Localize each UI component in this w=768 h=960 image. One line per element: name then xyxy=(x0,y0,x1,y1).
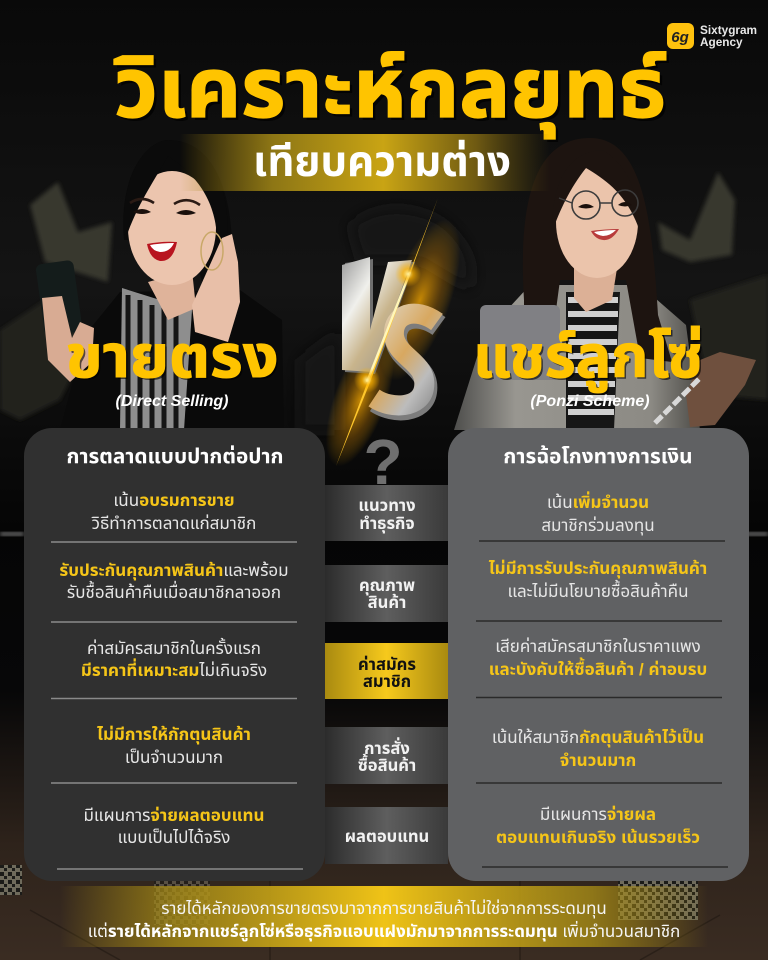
row 3: มีราคาที่เหมาะสมไม่เกินจริง xyxy=(81,658,267,680)
logo: Sixtygram Agency: 6g xyxy=(671,29,689,46)
row 1: เน้นเพิ่มจำนวน xyxy=(547,491,649,512)
row 5 xyxy=(496,804,700,847)
row 2: ไม่มีการรับประกันคุณภาพสินค้า xyxy=(489,558,707,579)
tab: business approach: แนวทาง xyxy=(358,496,416,515)
subtitle band xyxy=(180,134,550,191)
panel: direct selling xyxy=(24,428,325,881)
panel: direct selling: การตลาดแบบปากต่อปาก xyxy=(66,445,284,468)
footer band xyxy=(60,886,708,947)
question mark icon: ? xyxy=(363,426,403,498)
row 3: เสียค่าสมัครสมาชิกในราคาแพง xyxy=(495,637,701,656)
row 1 xyxy=(541,491,655,536)
label: direct selling: ขายตรง xyxy=(66,323,278,390)
tab: product quality: สินค้า xyxy=(368,593,406,612)
footer band: รายได้หลักของการขายตรงมาจากการขายสินค้าไม่ใช่จากการระดมทุน xyxy=(161,898,607,919)
tab: ordering xyxy=(325,727,448,784)
panel: ponzi scheme xyxy=(448,428,749,881)
row 3: ค่าสมัครสมาชิกในครั้งแรก xyxy=(87,637,261,658)
row 1: สมาชิกร่วมลงทุน xyxy=(541,516,655,536)
logo: Sixtygram Agency: Agency xyxy=(700,35,743,49)
row 5: มีแผนการจ่ายผลตอบแทน xyxy=(83,805,265,825)
row 2: และไม่มีนโยบายซื้อสินค้าคืน xyxy=(507,579,689,601)
row 2: รับประกันคุณภาพสินค้าและพร้อม xyxy=(59,560,289,581)
VS emblem xyxy=(312,198,477,475)
row 2 xyxy=(489,558,707,601)
subtitle band: เทียบความต่าง xyxy=(253,138,511,186)
tab: compensation xyxy=(325,807,448,864)
row 5: ตอบแทนเกินจริง เน้นรวยเร็ว xyxy=(496,827,700,847)
tab: membership fee: ค่าสมัคร xyxy=(358,655,416,674)
row 2 xyxy=(59,560,289,602)
label: direct selling: ขายตรง xyxy=(68,325,280,392)
center tabs xyxy=(325,485,448,864)
row 4: จำนวนมาก xyxy=(560,751,636,770)
label: direct selling: (Direct Selling) xyxy=(116,393,228,410)
panel: ponzi scheme: การฉ้อโกงทางการเงิน xyxy=(503,445,693,468)
tab: compensation: ผลตอบแทน xyxy=(345,827,429,846)
row 5: แบบเป็นไปได้จริง xyxy=(118,827,230,847)
label: ponzi scheme: แชร์ลูกโซ่ xyxy=(475,325,705,395)
row 4 xyxy=(492,727,704,770)
tab: ordering: การสั่ง xyxy=(364,737,410,758)
row 5 xyxy=(83,805,265,847)
footer band: แต่รายได้หลักจากแชร์ลูกโซ่หรือธุรกิจแอบแฝงมักมาจากการระดมทุน เพิ่มจำนวนสมาชิก xyxy=(88,920,680,942)
row 4 xyxy=(97,724,251,767)
tab: product quality xyxy=(325,565,448,622)
label: ponzi scheme: แชร์ลูกโซ่ xyxy=(473,323,703,393)
row 4: เป็นจำนวนมาก xyxy=(125,748,223,767)
row 1: เน้นอบรมการขาย xyxy=(113,490,235,510)
logo: Sixtygram Agency xyxy=(667,23,757,49)
lightning line xyxy=(336,198,438,466)
row 3 xyxy=(489,637,707,679)
row 3: และบังคับให้ซื้อสินค้า / ค่าอบรบ xyxy=(489,657,707,679)
tab: business approach: ทำธุรกิจ xyxy=(359,514,415,533)
row 2: รับชื้อสินค้าคืนเมื่อสมาชิกลาออก xyxy=(67,580,281,602)
tab: membership fee xyxy=(325,643,448,699)
title: วิเคราะห์กลยุทธ์ xyxy=(113,41,666,139)
woman right xyxy=(454,138,756,430)
logo: Sixtygram Agency: Sixtygram xyxy=(700,23,757,37)
tab: product quality: คุณภาพ xyxy=(359,576,415,595)
row 4: ไม่มีการให้กักตุนสินค้า xyxy=(97,724,251,745)
row 5: มีแผนการจ่ายผล xyxy=(540,804,656,824)
tab: ordering: ซื้อสินค้า xyxy=(358,753,416,775)
row 4: เน้นให้สมาชิกกักตุนสินค้าไว้เป็น xyxy=(492,727,704,748)
label: ponzi scheme: (Ponzi Scheme) xyxy=(530,393,650,410)
tab: membership fee: สมาชิก xyxy=(363,672,411,691)
woman left xyxy=(35,140,284,430)
title: วิเคราะห์กลยุทธ์ xyxy=(116,44,669,142)
tab: business approach xyxy=(325,485,448,541)
row 1 xyxy=(91,490,256,533)
row 3 xyxy=(81,637,267,680)
row 1: วิธีทำการตลาดแก่สมาชิก xyxy=(91,514,256,533)
